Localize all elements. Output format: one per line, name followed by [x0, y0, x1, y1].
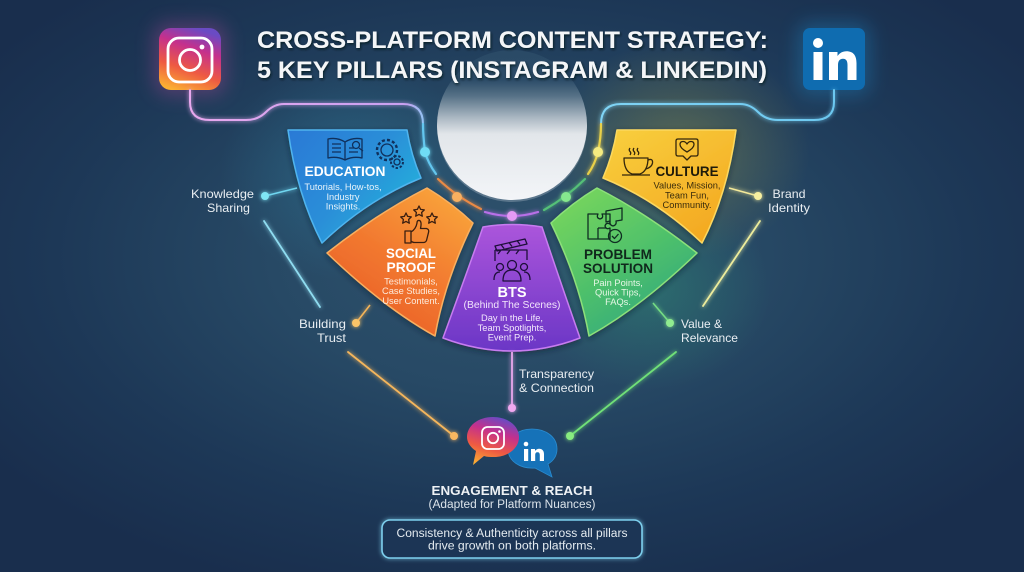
heading: BTS: BTS [498, 285, 527, 301]
panel: culture [603, 130, 736, 243]
panel: BTS [443, 224, 580, 351]
callout box: consistency: Consistency & Authenticity across all pillars [396, 528, 628, 540]
text: culture topics: Community. [663, 200, 711, 210]
panel: education [288, 130, 421, 243]
heading: social proof: SOCIAL [386, 245, 436, 261]
callout: knowledge sharing [191, 187, 297, 215]
text: culture topics [654, 180, 720, 210]
title [257, 27, 768, 84]
panel: social proof [327, 188, 473, 336]
callout: transparency and connection: & Connection [519, 381, 594, 395]
central disc [437, 50, 587, 202]
heading: social proof [386, 245, 436, 275]
callout: building trust: Building [299, 317, 346, 331]
text: problem solution topics: Pain Points, [593, 278, 643, 288]
icon: coffee cup [622, 148, 653, 175]
icon: open book [328, 138, 363, 160]
heading: culture: CULTURE [656, 163, 718, 179]
callout: building trust [299, 305, 370, 345]
callout: brand identity: Brand [772, 187, 806, 201]
heading: social proof: PROOF [386, 259, 436, 275]
arc node: orange [438, 179, 481, 209]
text: BTS topics: Day in the Life, [481, 313, 543, 323]
icon: LinkedIn logo [797, 22, 871, 96]
connector: yellow diagonal [703, 221, 760, 306]
text: BTS topics [478, 313, 546, 342]
heading: engagement and reach: ENGAGEMENT & REACH [432, 483, 592, 498]
title: CROSS-PLATFORM CONTENT STRATEGY: [257, 27, 768, 54]
arc node: green [544, 179, 585, 210]
connector: LinkedIn to arc [588, 90, 834, 174]
text: BTS topics: Event Prep. [488, 332, 536, 342]
icon: Instagram speech bubble [467, 417, 519, 465]
text: culture topics: Values, Mission, [654, 180, 720, 190]
connector: green diagonal [566, 352, 676, 440]
callout: building trust: Trust [317, 331, 347, 345]
callout: value and relevance [653, 303, 738, 345]
text: behind the scenes: (Behind The Scenes) [464, 300, 560, 311]
callout box: consistency: drive growth on both platforms. [428, 540, 596, 552]
title: 5 KEY PILLARS (INSTAGRAM & LINKEDIN) [257, 57, 767, 84]
text: education topics: Insights. [326, 202, 360, 212]
callout: value and relevance: Relevance [681, 331, 738, 345]
icon: puzzle [588, 208, 622, 242]
text: culture topics: Team Fun, [665, 190, 709, 200]
connector: cyan diagonal [264, 221, 320, 307]
icon: LinkedIn speech bubble [508, 429, 557, 477]
callout: brand identity: Identity [768, 201, 810, 215]
heading: education: EDUCATION [304, 163, 386, 179]
heading: problem solution [583, 246, 653, 276]
icon: gears [377, 140, 403, 168]
text: education topics: Industry [326, 192, 360, 202]
text: problem solution topics: Quick Tips, [595, 288, 641, 298]
callout: transparency and connection [508, 352, 594, 412]
callout: value and relevance: Value & [681, 317, 722, 331]
text: problem solution topics: FAQs. [605, 297, 631, 307]
text: social proof topics: Testimonials, [384, 276, 438, 286]
callout box: consistency [382, 520, 642, 558]
panel: problem solution [551, 188, 697, 336]
text: education topics: Tutorials, How-tos, [304, 182, 382, 192]
arc node: purple [485, 211, 538, 221]
icon: stars and thumb [401, 206, 437, 243]
text: social proof topics: Case Studies, [382, 286, 440, 296]
text: BTS topics: Team Spotlights, [478, 323, 546, 333]
heading: problem solution: PROBLEM [584, 246, 652, 262]
icon: heart speech bubble [676, 139, 698, 160]
callout: knowledge sharing: Knowledge [191, 187, 254, 201]
arc node: yellow [593, 147, 603, 157]
text: adapted for platform nuances: (Adapted for Platform Nuances) [428, 499, 596, 511]
text: social proof topics [382, 276, 440, 306]
text: social proof topics: User Content. [382, 296, 440, 306]
connector: orange diagonal [348, 352, 458, 440]
callout: transparency and connection: Transparency [519, 367, 594, 381]
callout: brand identity [729, 187, 810, 215]
text: problem solution topics [593, 278, 643, 307]
text: education topics [304, 182, 382, 212]
connector: Instagram to arc [190, 90, 436, 174]
heading: problem solution: SOLUTION [583, 260, 653, 276]
icon: Instagram logo [153, 22, 227, 96]
callout: knowledge sharing: Sharing [207, 201, 250, 215]
arc node: cyan [420, 147, 430, 157]
icon: clapperboard and people [494, 239, 530, 281]
